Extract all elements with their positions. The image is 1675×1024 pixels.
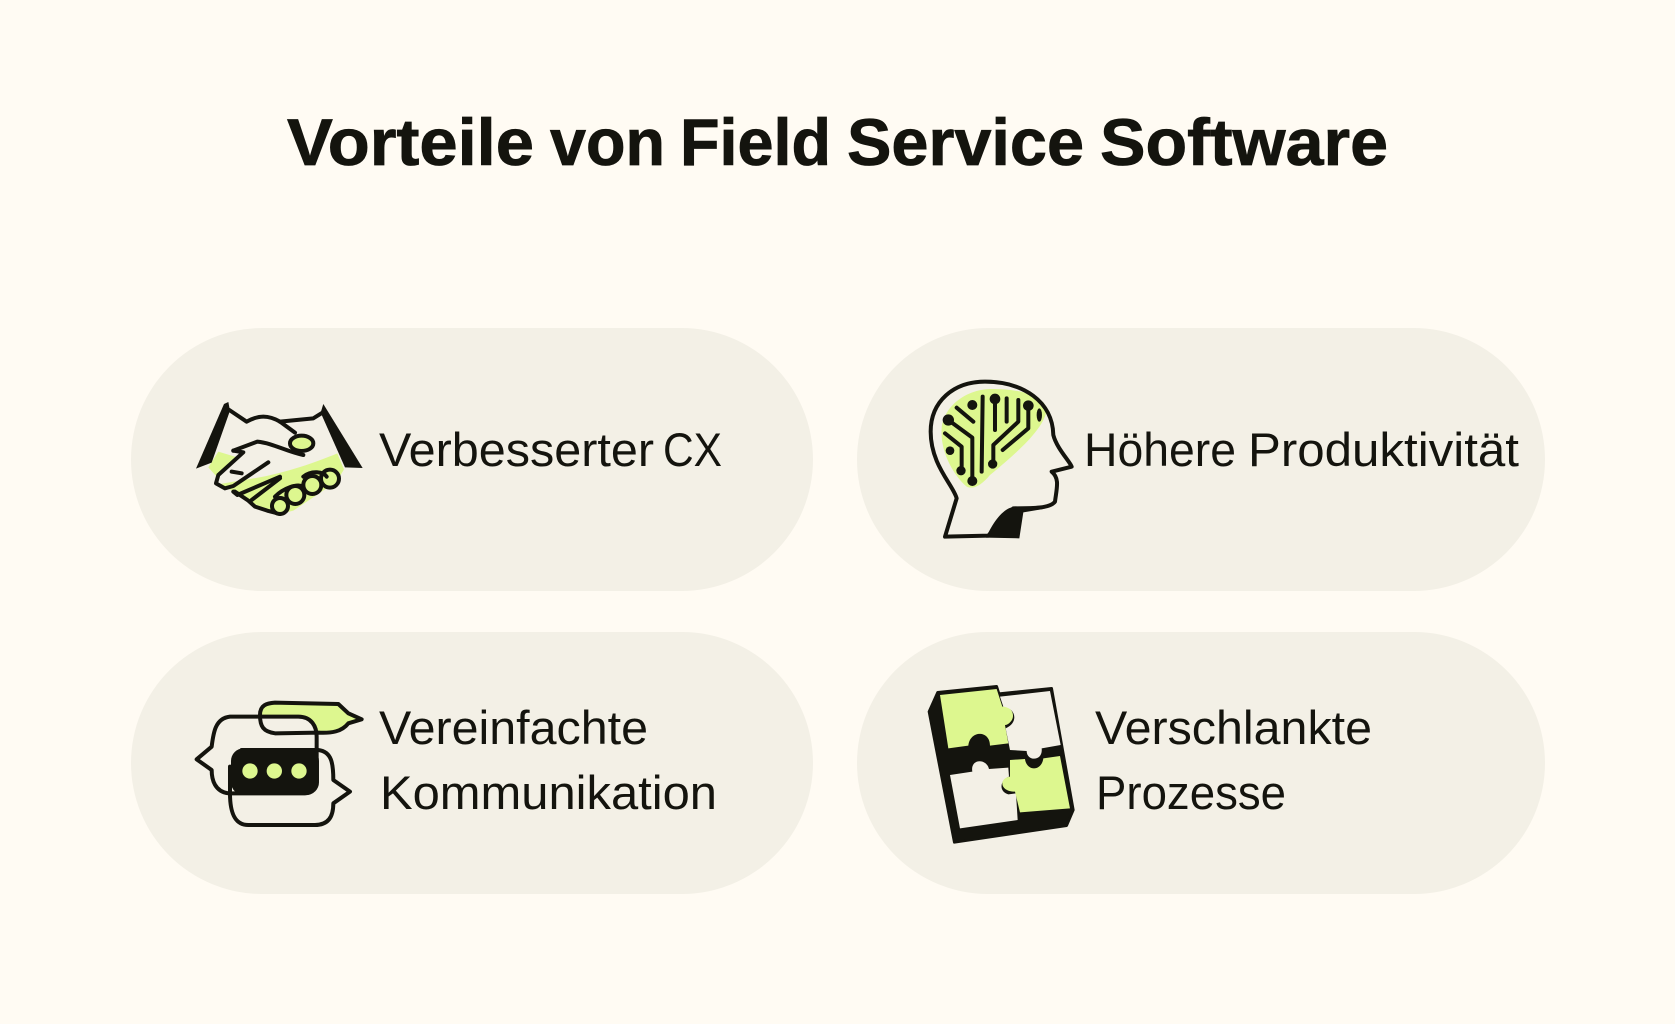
icon: head with circuit brain xyxy=(931,382,1072,538)
label: Verbesserter CX: Verbesserter xyxy=(379,423,654,476)
title: Software xyxy=(1100,105,1388,179)
icon: puzzle xyxy=(929,686,1073,842)
title: Vorteile xyxy=(287,105,534,179)
icon: handshake xyxy=(196,402,363,514)
title: Service xyxy=(847,105,1084,179)
label: Höhere Produktivität xyxy=(1084,423,1519,476)
label: Verschlankte Prozesse: Prozesse xyxy=(1096,766,1286,819)
panel: Vereinfachte Kommunikation xyxy=(131,632,813,894)
label: Vereinfachte Kommunikation: Vereinfachte xyxy=(379,701,648,754)
label: Verbesserter CX: CX xyxy=(663,423,722,476)
label: Verschlankte Prozesse xyxy=(1095,701,1372,819)
panel: Höhere Produktivität xyxy=(857,328,1545,591)
panel: Verschlankte Prozesse xyxy=(857,632,1545,894)
title: von xyxy=(550,105,665,179)
label: Verschlankte Prozesse: Verschlankte xyxy=(1095,701,1372,754)
title: Field xyxy=(680,105,831,179)
label: Höhere Produktivität: Produktivität xyxy=(1248,423,1519,476)
title xyxy=(287,105,1388,179)
label: Höhere Produktivität: Höhere xyxy=(1084,423,1236,476)
label: Vereinfachte Kommunikation xyxy=(379,701,717,819)
icon: speech bubbles xyxy=(197,703,362,825)
panel: Verbesserter CX xyxy=(131,328,813,591)
label: Vereinfachte Kommunikation: Kommunikation xyxy=(380,766,717,819)
